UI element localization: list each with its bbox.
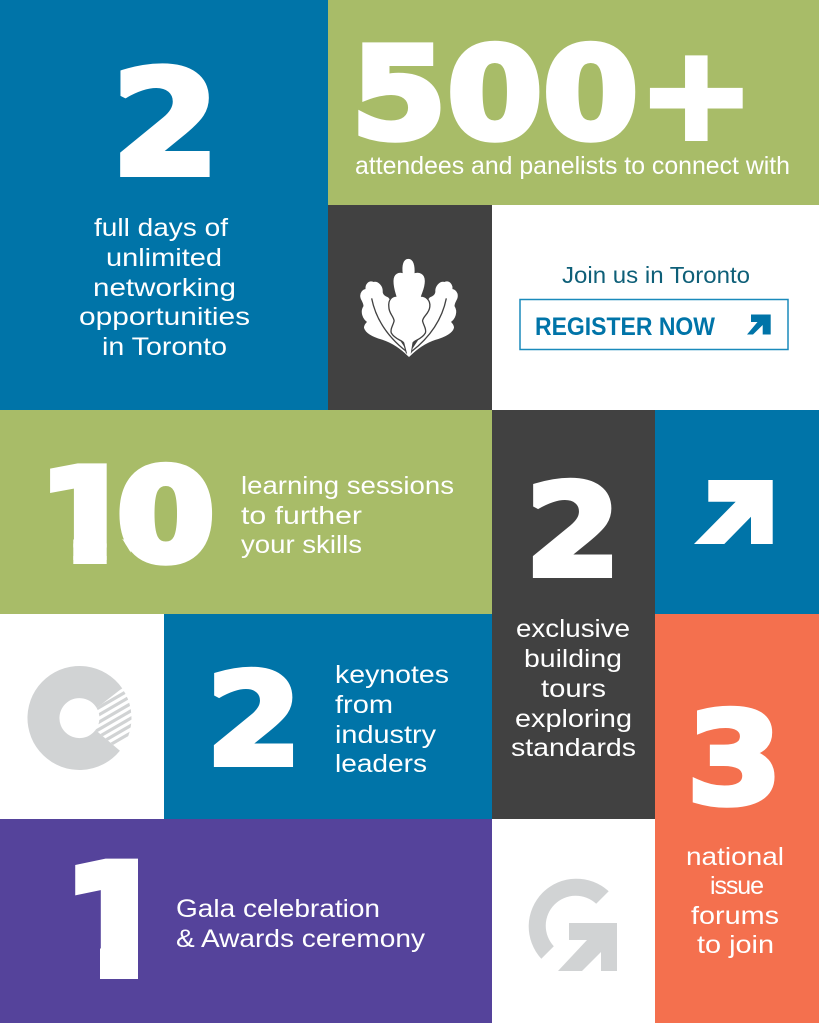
number: 2 keynotes: 2: [206, 647, 302, 795]
icon: oak leaf: [361, 260, 457, 356]
text: national issue forums: national: [686, 843, 784, 871]
text: keynotes: from: [335, 691, 393, 719]
text: full days of networking: full days of: [94, 214, 228, 242]
text: join us in Toronto: Join us in Toronto: [562, 262, 750, 288]
panel: oak leaf logo: [328, 205, 492, 410]
number: 10: 0: [117, 443, 214, 590]
panel: join us / register: [492, 205, 819, 410]
text: learning sessions: to further: [241, 502, 362, 530]
text: attendees and panelists: attendees and panelists to connect with: [355, 152, 790, 180]
panel: 500+ attendees: [328, 0, 819, 205]
panel: 2 keynotes: [164, 614, 492, 819]
text: gala celebration: Gala celebration: [176, 895, 380, 923]
number: 2 tours: 2: [525, 458, 621, 606]
text: keynotes: industry: [335, 721, 437, 749]
number: 2 days: 2: [111, 39, 220, 209]
text: exclusive building tours: exploring: [515, 705, 632, 733]
text: full days of networking: networking: [93, 274, 236, 302]
panel: circle logo: [28, 666, 132, 770]
panel: 1 gala: [0, 819, 492, 1023]
number: 3: 3: [687, 686, 782, 834]
text: national issue forums: forums: [691, 902, 779, 930]
panel: 10 learning sessions: [0, 410, 492, 614]
button: register now: [520, 300, 788, 350]
text: learning sessions: learning sessions: [241, 472, 454, 500]
text: full days of networking: [79, 214, 250, 361]
text: exclusive building tours: [511, 615, 636, 762]
text: national issue forums: [686, 843, 784, 959]
text: exclusive building tours: exclusive: [516, 615, 630, 643]
text: learning sessions: [241, 472, 454, 559]
text: full days of networking: opportunities: [79, 303, 250, 331]
text: full days of networking: unlimited: [106, 244, 222, 272]
text: national issue forums: to join: [697, 931, 774, 959]
number: 1: 1: [64, 836, 168, 1010]
panel: 2 building tours: [492, 410, 655, 819]
panel: 3 forums: [655, 614, 819, 1023]
text: gala celebration: & Awards ceremony: [176, 925, 426, 953]
text: national issue forums: issue: [710, 872, 764, 900]
number: 500+: 500+: [351, 21, 754, 169]
button: register now: REGISTER NOW: [535, 313, 715, 341]
text: full days of networking: in Toronto: [102, 333, 227, 361]
number: 10: [50, 462, 212, 566]
icon: large arrow: [694, 480, 773, 544]
text: keynotes: keynotes: [335, 661, 449, 689]
text: keynotes: leaders: [335, 750, 427, 778]
icon: small arrow: [747, 314, 771, 334]
icon: G with arrow: [529, 879, 617, 971]
panel: G arrow logo: [492, 819, 655, 1023]
panel: blue arrow: [655, 410, 819, 614]
text: exclusive building tours: building: [524, 645, 622, 673]
panel: 2 full days: [0, 0, 328, 410]
text: learning sessions: your skills: [241, 531, 362, 559]
text: keynotes: [335, 661, 449, 778]
text: exclusive building tours: tours: [541, 675, 606, 703]
text: gala celebration: [176, 895, 426, 953]
number: 10: 1: [39, 443, 136, 590]
text: exclusive building tours: standards: [511, 734, 636, 762]
icon: striped circle: [27, 666, 135, 770]
